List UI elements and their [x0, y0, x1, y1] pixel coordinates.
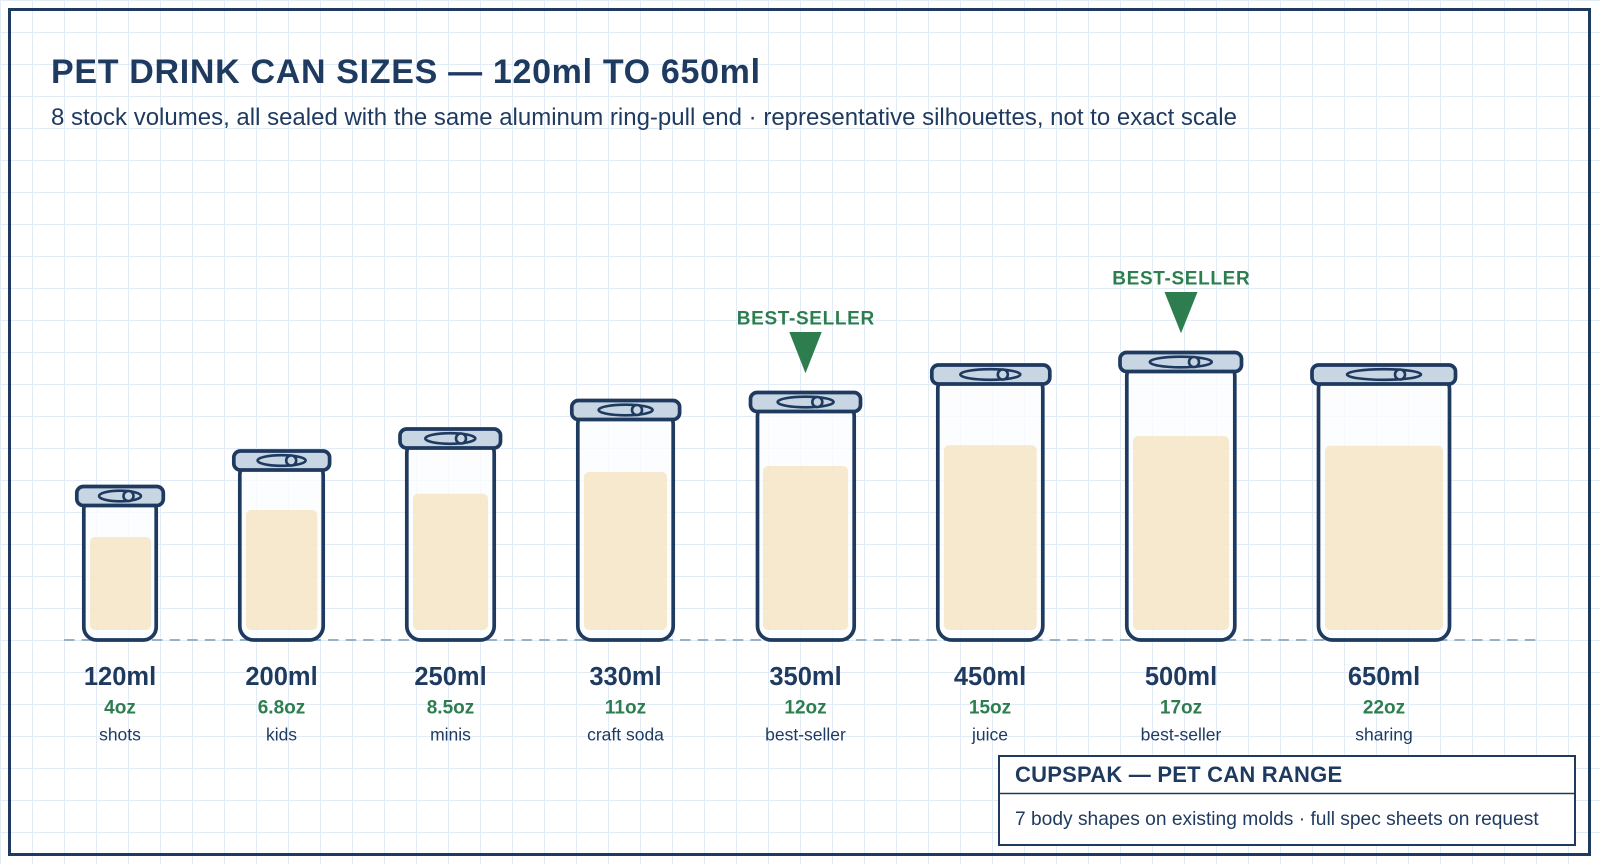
- can: 450ml: [932, 365, 1050, 640]
- label: 500ml: 500ml: [1145, 663, 1217, 691]
- can: 200ml: [234, 451, 330, 640]
- best-seller marker: 500ml: BEST-SELLER: [1112, 268, 1250, 289]
- lid: 650ml: [1312, 365, 1456, 384]
- label: 450ml: [954, 663, 1026, 744]
- can: 330ml: [572, 400, 680, 640]
- lid: 120ml: [77, 486, 163, 506]
- label: 120ml: 4oz: [104, 698, 136, 718]
- label: 650ml: [1348, 663, 1420, 744]
- can: 250ml: [400, 429, 500, 640]
- label: 500ml: 17oz: [1160, 698, 1202, 718]
- lid: 250ml: [400, 429, 500, 448]
- label: 450ml: juice: [971, 724, 1008, 744]
- can: 350ml: [750, 392, 860, 640]
- label: 200ml: 6.8oz: [258, 698, 305, 718]
- label: 450ml: 450ml: [954, 663, 1026, 691]
- label: 650ml: 650ml: [1348, 663, 1420, 691]
- lid: 330ml: [572, 400, 680, 420]
- label: 450ml: 15oz: [969, 698, 1011, 718]
- panel heading: CUPSPAK — PET CAN RANGE: [1015, 762, 1342, 787]
- subtitle: 8 stock volumes, all sealed with the same aluminum ring-pull end · representative silhouettes, not to exact scale: [51, 104, 1237, 131]
- lid: 200ml: [234, 451, 330, 470]
- lid: 500ml: [1120, 352, 1242, 372]
- best-seller marker: 350ml: [737, 308, 875, 373]
- panel: brand note: [999, 756, 1575, 845]
- best-seller marker: 350ml: BEST-SELLER: [737, 308, 875, 329]
- label: 330ml: craft soda: [587, 724, 664, 744]
- can: 120ml: [77, 486, 163, 640]
- label: 500ml: [1141, 663, 1222, 744]
- label: 350ml: 12oz: [784, 698, 827, 718]
- label: 250ml: 250ml: [414, 663, 487, 691]
- label: 120ml: shots: [99, 724, 141, 744]
- lid: 350ml: [750, 392, 860, 412]
- label: 120ml: [84, 663, 156, 744]
- label: 650ml: 22oz: [1363, 698, 1405, 718]
- label: 650ml: sharing: [1355, 724, 1413, 744]
- label: 330ml: 330ml: [589, 663, 662, 691]
- label: 350ml: 350ml: [769, 663, 842, 691]
- can: 500ml: [1120, 352, 1242, 640]
- best-seller marker: 500ml: [1112, 268, 1250, 333]
- label: 120ml: 120ml: [84, 663, 156, 691]
- can: 650ml: [1312, 365, 1456, 640]
- label: 330ml: [587, 663, 664, 744]
- lid: 450ml: [932, 365, 1050, 384]
- label: 250ml: minis: [430, 724, 471, 744]
- label: 330ml: 11oz: [605, 698, 646, 718]
- label: 200ml: kids: [266, 724, 297, 744]
- label: 350ml: [765, 663, 846, 744]
- label: 250ml: 8.5oz: [427, 698, 474, 718]
- label: 200ml: 200ml: [245, 663, 318, 691]
- label: 200ml: [245, 663, 318, 744]
- baseline shelf line: [64, 639, 1536, 641]
- label: 500ml: best-seller: [1141, 724, 1222, 744]
- title: PET DRINK CAN SIZES — 120ml TO 650ml: [51, 53, 761, 91]
- label: 250ml: [414, 663, 487, 744]
- panel text: 7 body shapes on existing molds · full spec sheets on request: [1015, 809, 1539, 830]
- label: 350ml: best-seller: [765, 724, 846, 744]
